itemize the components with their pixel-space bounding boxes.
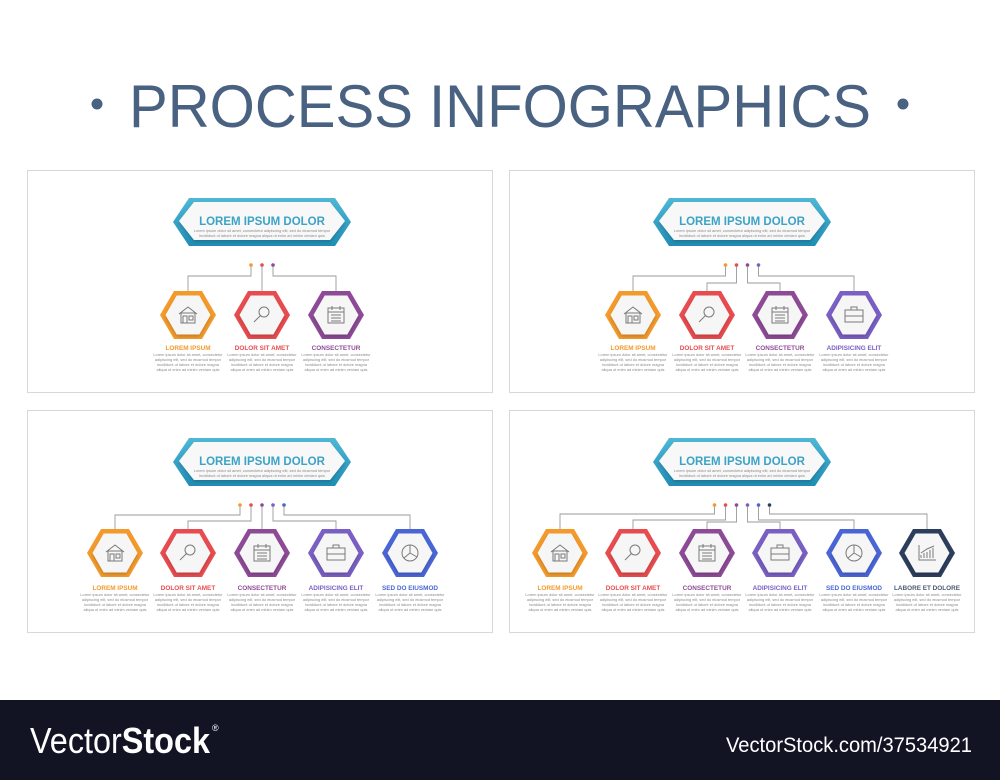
footer bar: VectorStock.com/37534921 xyxy=(726,734,972,757)
step 2: incididunt ut labore et dolore magna xyxy=(602,602,665,607)
connectors xyxy=(633,263,854,291)
step 4: incididunt ut labore et dolore magna xyxy=(823,362,886,367)
step 3: CONSECTETUR xyxy=(683,585,732,592)
header hexagon: Lorem ipsum dolor sit amet, consectetur adipiscing elit, sed do eiusmod tempor xyxy=(194,468,331,473)
step 6: LABORE ET DOLORE xyxy=(894,585,961,592)
step 1: incididunt ut labore et dolore magna xyxy=(84,602,147,607)
step 1: incididunt ut labore et dolore magna xyxy=(157,362,220,367)
step 1: Lorem ipsum dolor sit amet, consectetur xyxy=(598,352,668,357)
footer bar: VectorStock xyxy=(30,720,211,761)
step 5 xyxy=(375,529,445,612)
step 2 xyxy=(672,291,742,372)
step 2: aliqua ut enim ad minim veniam quis xyxy=(602,607,665,612)
step 2: aliqua ut enim ad minim veniam quis xyxy=(676,367,739,372)
header hexagon: LOREM IPSUM DOLOR xyxy=(679,456,806,468)
step 3: Lorem ipsum dolor sit amet, consectetur xyxy=(301,352,371,357)
step 4: Lorem ipsum dolor sit amet, consectetur xyxy=(819,352,889,357)
step 2: DOLOR SIT AMET xyxy=(235,345,289,352)
panel: three steps xyxy=(28,170,492,392)
step 3: CONSECTETUR xyxy=(756,345,805,352)
step 1: incididunt ut labore et dolore magna xyxy=(529,602,592,607)
step 3: incididunt ut labore et dolore magna xyxy=(231,602,294,607)
step 3: aliqua ut enim ad minim veniam quis xyxy=(231,607,294,612)
panel: four steps xyxy=(510,170,974,392)
step 5: SED DO EIUSMOD xyxy=(826,585,882,592)
step 3: Lorem ipsum dolor sit amet, consectetur xyxy=(672,592,742,597)
panel: six steps xyxy=(510,410,974,632)
step 5: aliqua ut enim ad minim veniam quis xyxy=(823,607,886,612)
step 3: CONSECTETUR xyxy=(312,345,361,352)
step 1: adipiscing elit, sed do eiusmod tempor xyxy=(600,357,667,362)
step 2: adipiscing elit, sed do eiusmod tempor xyxy=(600,597,667,602)
header hexagon: incididunt ut labore et dolore magna aliqua ut enim ad minim veniam quis xyxy=(199,233,325,238)
step 3: Lorem ipsum dolor sit amet, consectetur xyxy=(745,352,815,357)
step 4: aliqua ut enim ad minim veniam quis xyxy=(749,607,812,612)
step 3: incididunt ut labore et dolore magna xyxy=(676,602,739,607)
step 2: DOLOR SIT AMET xyxy=(161,585,215,592)
header hexagon: LOREM IPSUM DOLOR xyxy=(199,216,326,228)
step 3: aliqua ut enim ad minim veniam quis xyxy=(676,607,739,612)
step 2: aliqua ut enim ad minim veniam quis xyxy=(231,367,294,372)
step 1: aliqua ut enim ad minim veniam quis xyxy=(529,607,592,612)
connectors xyxy=(188,263,336,291)
step 5: adipiscing elit, sed do eiusmod tempor xyxy=(821,597,888,602)
header hexagon: Lorem ipsum dolor sit amet, consectetur adipiscing elit, sed do eiusmod tempor xyxy=(194,228,331,233)
step 2: Lorem ipsum dolor sit amet, consectetur xyxy=(153,592,223,597)
step 5: Lorem ipsum dolor sit amet, consectetur xyxy=(819,592,889,597)
step 2: Lorem ipsum dolor sit amet, consectetur xyxy=(672,352,742,357)
step 2: adipiscing elit, sed do eiusmod tempor xyxy=(229,357,296,362)
step 4: Lorem ipsum dolor sit amet, consectetur xyxy=(301,592,371,597)
step 4: incididunt ut labore et dolore magna xyxy=(305,602,368,607)
step 5 xyxy=(819,529,889,612)
step 2: incididunt ut labore et dolore magna xyxy=(157,602,220,607)
step 4: ADIPISICING ELIT xyxy=(827,345,881,352)
step 3: adipiscing elit, sed do eiusmod tempor xyxy=(229,597,296,602)
step 1 xyxy=(80,529,150,612)
step 6: incididunt ut labore et dolore magna xyxy=(896,602,959,607)
step 6: Lorem ipsum dolor sit amet, consectetur xyxy=(892,592,962,597)
step 1: Lorem ipsum dolor sit amet, consectetur xyxy=(80,592,150,597)
header hexagon xyxy=(173,198,351,246)
step 4: aliqua ut enim ad minim veniam quis xyxy=(305,607,368,612)
step 6: aliqua ut enim ad minim veniam quis xyxy=(896,607,959,612)
step 4: Lorem ipsum dolor sit amet, consectetur xyxy=(745,592,815,597)
step 1: adipiscing elit, sed do eiusmod tempor xyxy=(155,357,222,362)
connectors xyxy=(115,503,410,529)
footer bar xyxy=(0,700,1000,780)
step 1: Lorem ipsum dolor sit amet, consectetur xyxy=(153,352,223,357)
step 3: adipiscing elit, sed do eiusmod tempor xyxy=(674,597,741,602)
header hexagon: Lorem ipsum dolor sit amet, consectetur adipiscing elit, sed do eiusmod tempor xyxy=(674,468,811,473)
step 3: incididunt ut labore et dolore magna xyxy=(305,362,368,367)
step 3: aliqua ut enim ad minim veniam quis xyxy=(305,367,368,372)
step 4: adipiscing elit, sed do eiusmod tempor xyxy=(303,597,370,602)
step 3: Lorem ipsum dolor sit amet, consectetur xyxy=(227,592,297,597)
step 3: adipiscing elit, sed do eiusmod tempor xyxy=(303,357,370,362)
step 4 xyxy=(301,529,371,612)
step 2: aliqua ut enim ad minim veniam quis xyxy=(157,607,220,612)
step 1: LOREM IPSUM xyxy=(610,345,656,352)
step 4: ADIPISICING ELIT xyxy=(753,585,807,592)
step 1: aliqua ut enim ad minim veniam quis xyxy=(157,367,220,372)
step 1: LOREM IPSUM xyxy=(92,585,138,592)
step 1: incididunt ut labore et dolore magna xyxy=(602,362,665,367)
step 5: adipiscing elit, sed do eiusmod tempor xyxy=(377,597,444,602)
step 5: Lorem ipsum dolor sit amet, consectetur xyxy=(375,592,445,597)
step 2: incididunt ut labore et dolore magna xyxy=(676,362,739,367)
header hexagon xyxy=(173,438,351,486)
step 5: incididunt ut labore et dolore magna xyxy=(379,602,442,607)
step 3: adipiscing elit, sed do eiusmod tempor xyxy=(747,357,814,362)
step 6: adipiscing elit, sed do eiusmod tempor xyxy=(894,597,961,602)
header hexagon: incididunt ut labore et dolore magna aliqua ut enim ad minim veniam quis xyxy=(199,473,325,478)
step 2 xyxy=(227,291,297,372)
step 1: aliqua ut enim ad minim veniam quis xyxy=(84,607,147,612)
step 3 xyxy=(301,291,371,372)
header hexagon: LOREM IPSUM DOLOR xyxy=(199,456,326,468)
step 2 xyxy=(153,529,223,612)
header hexagon: incididunt ut labore et dolore magna aliqua ut enim ad minim veniam quis xyxy=(679,473,805,478)
step 1 xyxy=(598,291,668,372)
step 1 xyxy=(153,291,223,372)
step 4: adipiscing elit, sed do eiusmod tempor xyxy=(821,357,888,362)
step 4 xyxy=(745,529,815,612)
footer bar: ® xyxy=(212,723,219,733)
panel: five steps xyxy=(28,410,492,632)
step 2: Lorem ipsum dolor sit amet, consectetur xyxy=(598,592,668,597)
step 4: adipiscing elit, sed do eiusmod tempor xyxy=(747,597,814,602)
step 5: SED DO EIUSMOD xyxy=(382,585,438,592)
step 2: adipiscing elit, sed do eiusmod tempor xyxy=(674,357,741,362)
step 2: incididunt ut labore et dolore magna xyxy=(231,362,294,367)
step 1: LOREM IPSUM xyxy=(537,585,583,592)
step 3: aliqua ut enim ad minim veniam quis xyxy=(749,367,812,372)
step 3: incididunt ut labore et dolore magna xyxy=(749,362,812,367)
step 1: aliqua ut enim ad minim veniam quis xyxy=(602,367,665,372)
step 4: aliqua ut enim ad minim veniam quis xyxy=(823,367,886,372)
step 1: Lorem ipsum dolor sit amet, consectetur xyxy=(525,592,595,597)
step 2: DOLOR SIT AMET xyxy=(680,345,734,352)
header hexagon xyxy=(653,198,831,246)
step 4: incididunt ut labore et dolore magna xyxy=(749,602,812,607)
step 3 xyxy=(227,529,297,612)
header hexagon: Lorem ipsum dolor sit amet, consectetur adipiscing elit, sed do eiusmod tempor xyxy=(674,228,811,233)
step 4 xyxy=(819,291,889,372)
step 2 xyxy=(598,529,668,612)
step 3 xyxy=(745,291,815,372)
step 4: ADIPISICING ELIT xyxy=(309,585,363,592)
connectors xyxy=(560,503,927,529)
step 5: aliqua ut enim ad minim veniam quis xyxy=(379,607,442,612)
step 2: adipiscing elit, sed do eiusmod tempor xyxy=(155,597,222,602)
header hexagon: LOREM IPSUM DOLOR xyxy=(679,216,806,228)
step 1: LOREM IPSUM xyxy=(165,345,211,352)
step 5: incididunt ut labore et dolore magna xyxy=(823,602,886,607)
step 2: DOLOR SIT AMET xyxy=(606,585,660,592)
header hexagon: incididunt ut labore et dolore magna aliqua ut enim ad minim veniam quis xyxy=(679,233,805,238)
step 3: CONSECTETUR xyxy=(238,585,287,592)
step 2: Lorem ipsum dolor sit amet, consectetur xyxy=(227,352,297,357)
step 3 xyxy=(672,529,742,612)
step 1: adipiscing elit, sed do eiusmod tempor xyxy=(527,597,594,602)
step 1 xyxy=(525,529,595,612)
header hexagon xyxy=(653,438,831,486)
step 1: adipiscing elit, sed do eiusmod tempor xyxy=(82,597,149,602)
title: PROCESS INFOGRAPHICS xyxy=(129,73,871,140)
step 6 xyxy=(892,529,962,612)
